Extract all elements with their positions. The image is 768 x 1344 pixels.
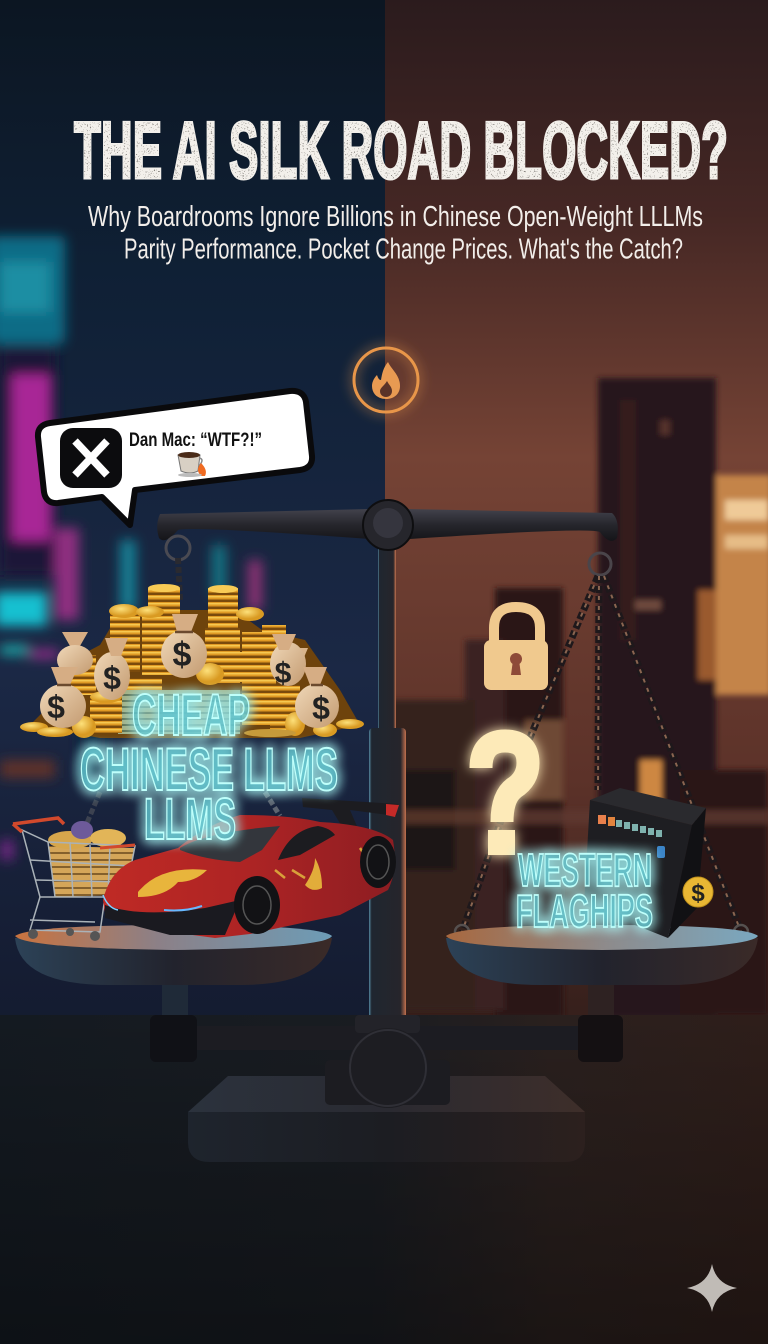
money bag back left [57, 632, 93, 675]
icon: sparkle watermark [687, 1264, 737, 1312]
right chains [455, 553, 748, 939]
money bag far right: $ [312, 690, 330, 726]
neon label: western flagships: FLAGHIPS [516, 885, 653, 937]
coin mound [20, 584, 364, 738]
icon: flame badge [354, 348, 418, 412]
icon: coffee cup and flame [178, 452, 206, 477]
subtitle [88, 201, 703, 266]
icon: padlock [484, 607, 548, 690]
shopping cart [13, 818, 135, 941]
black box with price tag: $ [691, 880, 705, 907]
neon label: cheap chinese LLMs [80, 683, 338, 852]
scale: beam and post [157, 500, 618, 1048]
money bag far left: $ [47, 689, 65, 725]
speech bubble: Dan Mac [38, 391, 312, 525]
black box with price tag [584, 788, 713, 938]
money bag center: $ [173, 636, 192, 674]
left chains and hook [84, 536, 280, 830]
neon label: western flagships: WESTERN [518, 844, 652, 896]
money bag center [161, 614, 207, 678]
money bag far left [40, 667, 86, 728]
neon label: cheap chinese LLMs: CHEAP [132, 683, 250, 748]
right pan [446, 925, 758, 985]
left pan [15, 925, 332, 985]
money bag back right [292, 648, 308, 662]
money bag far right [295, 667, 339, 728]
money bag right middle [270, 634, 306, 690]
scale: base stand [150, 985, 623, 1162]
icon: X logo [60, 428, 122, 488]
quote text: Dan Mac: “WTF?!” [129, 430, 262, 451]
icon: glowing question mark [481, 741, 528, 855]
neon label: western flagships [516, 844, 653, 937]
neon label: cheap chinese LLMs: CHINESE LLMS [80, 736, 338, 803]
money bag left middle [94, 638, 130, 700]
money bag right middle: $ [275, 657, 292, 690]
money pile: coins and bags [20, 584, 364, 738]
neon label: cheap chinese LLMs: LLMS [144, 787, 236, 852]
red sports car [103, 798, 399, 938]
money bag left middle: $ [103, 660, 121, 696]
